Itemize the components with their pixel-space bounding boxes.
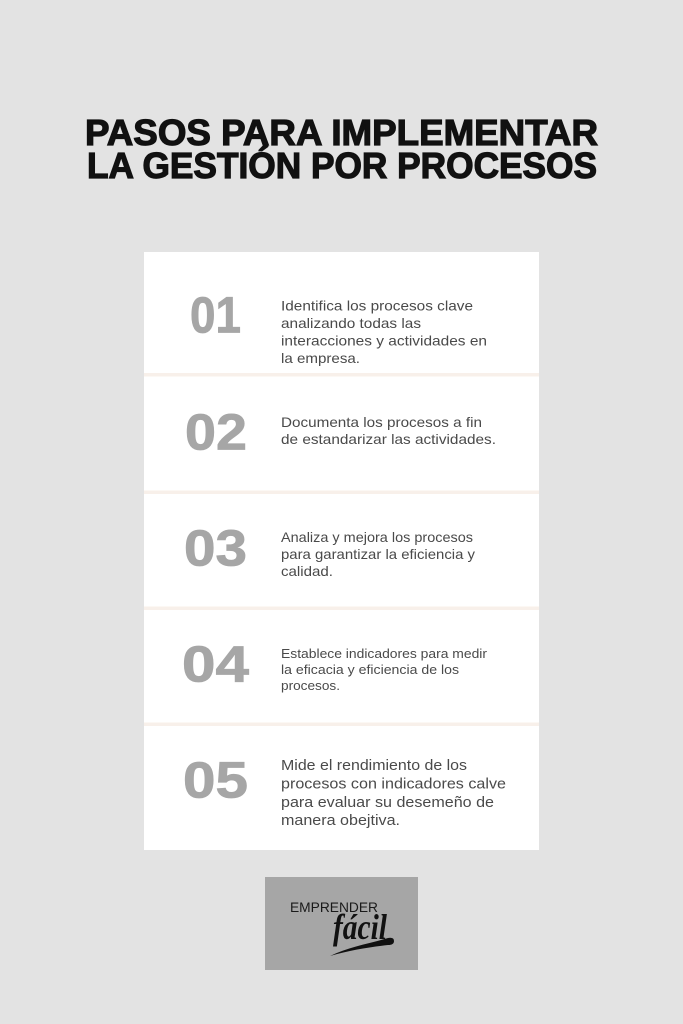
title	[85, 112, 598, 186]
step 05: manera obejtiva.	[281, 812, 400, 829]
step 05: procesos con indicadores calve	[281, 776, 506, 792]
step 02	[185, 404, 496, 460]
step 04: Establece indicadores para medir	[281, 646, 488, 661]
logo: Emprender Fácil	[265, 877, 418, 970]
panel: steps list	[144, 252, 539, 850]
step 01: Identifica los procesos clave	[281, 298, 473, 314]
step 04: la eficacia y eficiencia de los	[281, 662, 460, 677]
step 04	[182, 636, 488, 693]
step 05: Mide el rendimiento de los	[281, 757, 467, 774]
step 03	[184, 520, 475, 579]
step 03: 03	[184, 520, 247, 576]
step 01: 01	[190, 286, 241, 344]
step 02: de estandarizar las actividades.	[281, 431, 496, 447]
step 02: Documenta los procesos a fin	[281, 414, 482, 430]
title: LA GESTIÓN POR PROCESOS	[87, 144, 597, 186]
step 01	[190, 286, 487, 366]
step 05: 05	[183, 752, 248, 808]
step 02: 02	[185, 404, 247, 460]
step 03: calidad.	[281, 563, 333, 579]
step 01: analizando todas las	[281, 315, 421, 331]
title: PASOS PARA IMPLEMENTAR	[85, 112, 598, 153]
logo: Emprender Fácil: fácil	[333, 907, 387, 947]
step 01: la empresa.	[281, 350, 360, 366]
step 05	[183, 752, 506, 829]
step 04: procesos.	[281, 678, 340, 693]
step 04: 04	[182, 636, 250, 692]
step 03: para garantizar la eficiencia y	[281, 546, 475, 562]
logo: Emprender Fácil: EMPRENDER	[290, 899, 378, 915]
step 01: interacciones y actividades en	[281, 332, 487, 348]
step 05: para evaluar su desemeño de	[281, 794, 494, 811]
step 03: Analiza y mejora los procesos	[281, 529, 473, 545]
